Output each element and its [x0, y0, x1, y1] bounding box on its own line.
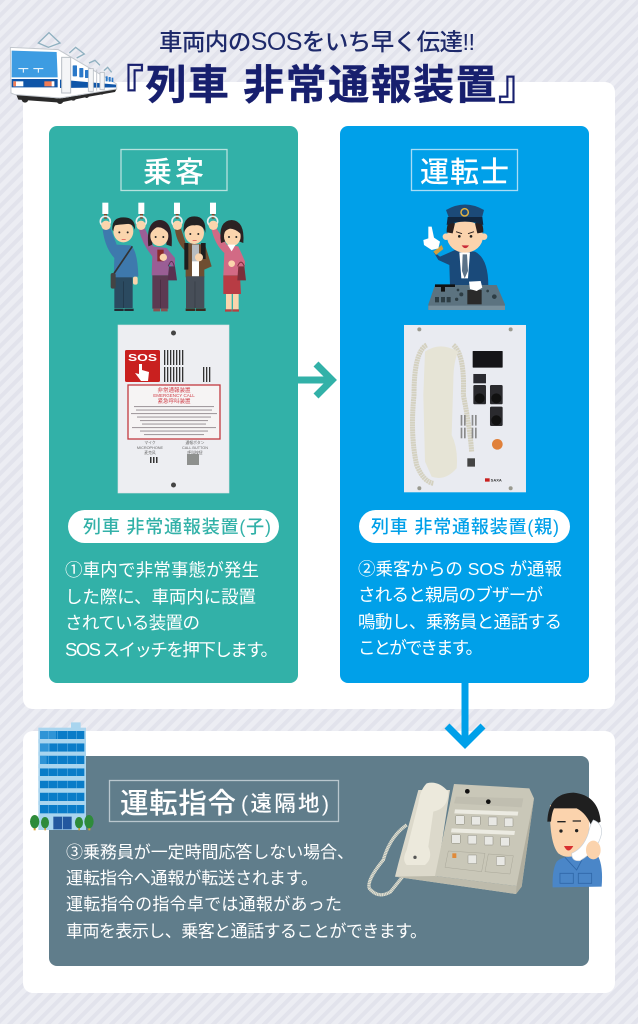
man 1	[101, 217, 138, 311]
text: passenger step: ①車内で非常事態が発生	[65, 560, 259, 580]
text: dispatch step: 運転指令へ通報が転送されます。	[66, 869, 318, 888]
label pill: child unit: 列車 非常通報装置(子)	[83, 517, 271, 537]
heading: dispatch	[110, 780, 338, 822]
icon: handset	[423, 346, 458, 478]
heading: dispatch: 運転指令	[120, 788, 236, 820]
device: child unit photo: 呼叫按钮	[187, 450, 203, 455]
man 3	[173, 216, 212, 311]
text: driver step	[358, 559, 562, 658]
text: passenger step: SOSスイッチを押下します。	[65, 639, 278, 660]
text: passenger step	[65, 560, 278, 660]
icon: coiled cord	[412, 345, 472, 483]
panel: lower white card	[23, 731, 615, 993]
device: child unit photo: MICROPHONE	[137, 446, 164, 450]
label: emergency notice	[128, 385, 220, 439]
device: child unit photo	[118, 325, 229, 493]
arrow: passenger to driver	[298, 364, 332, 396]
label: emergency notice: EMERGENCY CALL	[153, 393, 195, 398]
label pill: child unit	[68, 510, 279, 543]
text: passenger step: されている装置の	[65, 613, 200, 633]
heading: dispatch: (遠隔地)	[241, 792, 329, 816]
subtitle: 車両内のSOSをいち早く伝達!!	[159, 28, 475, 56]
panel: passenger	[49, 126, 298, 683]
text: driver step: されると親局のブザーが	[358, 585, 544, 605]
text: driver step: ②乗客からの SOS が通報	[358, 559, 562, 579]
icon: train	[10, 33, 117, 104]
device: child unit photo: 麦克风	[144, 450, 156, 455]
label: emergency notice: 紧急呼叫装置	[157, 397, 191, 405]
text: dispatch step: 運転指令の指令卓では通報があった	[66, 895, 342, 914]
panel: upper white card	[23, 82, 615, 709]
arrow: driver to dispatcher	[447, 683, 483, 744]
heading: passenger	[121, 150, 227, 190]
woman 2	[136, 220, 177, 311]
device: parent unit photo: SAXA	[491, 478, 502, 483]
text: dispatch step: ③乗務員が一定時間応答しない場合、	[66, 842, 354, 862]
device: dispatcher console	[369, 783, 534, 895]
text: passenger step: した際に、車両内に設置	[65, 587, 256, 607]
label pill: parent unit	[359, 510, 570, 543]
woman 4	[209, 220, 246, 312]
text: driver step: 鳴動し、乗務員と通話する	[358, 612, 562, 632]
device: parent unit photo	[404, 325, 526, 492]
device: child unit photo: マイク	[144, 440, 156, 445]
device: child unit photo: 通報ボタン	[186, 440, 205, 445]
title: 『列車 非常通報装置』	[103, 62, 539, 108]
heading: passenger: 乗客	[143, 156, 204, 189]
text: dispatch step: 車両を表示し、乗客と通話することができます。	[66, 922, 427, 941]
label: emergency notice: 非常通報装置	[157, 386, 191, 394]
heading: driver: 運転士	[420, 156, 509, 189]
icon: train driver	[423, 204, 505, 310]
icon: SOS button: SOS	[128, 352, 157, 364]
text: dispatch step	[66, 842, 427, 941]
icon: office building	[30, 722, 94, 830]
icon: standing passengers	[100, 203, 246, 312]
label pill: parent unit: 列車 非常通報装置(親)	[371, 517, 559, 537]
icon: SOS button	[125, 350, 160, 382]
panel: dispatch	[49, 756, 589, 966]
text: driver step: ことができます。	[358, 638, 483, 658]
device: child unit photo: CALL BUTTON	[182, 446, 208, 450]
panel: driver	[340, 126, 589, 683]
icon: operator on the phone	[547, 793, 602, 887]
heading: driver	[412, 150, 518, 190]
